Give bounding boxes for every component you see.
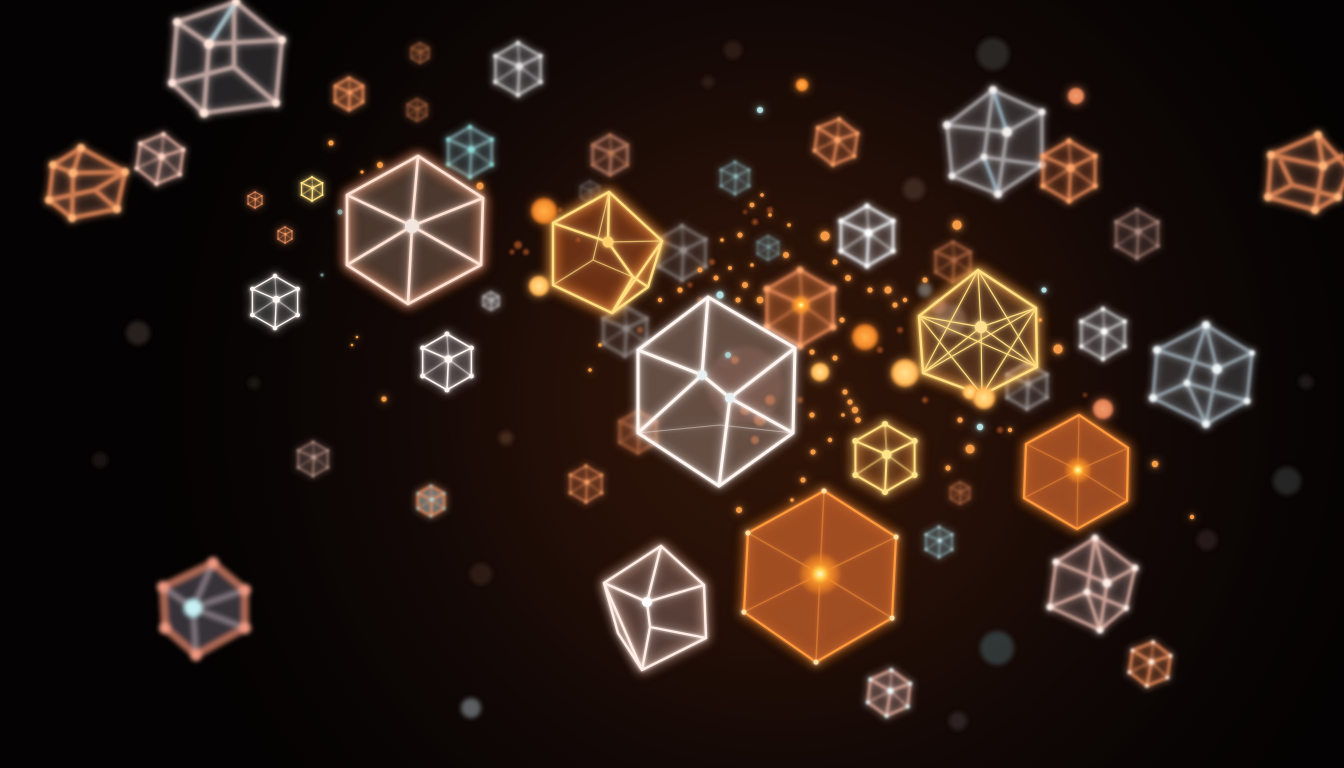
polyhedron: top-left cube: [168, 0, 286, 118]
small cube: [406, 98, 428, 122]
small cube: [1079, 307, 1127, 361]
orange particles: [328, 140, 1194, 519]
polyhedron: white cube bottom centre: [604, 546, 706, 670]
small cube: [579, 180, 601, 204]
small cube: [1126, 637, 1174, 691]
pale blue particles: [320, 107, 1047, 430]
glowing orbs: [528, 78, 1114, 596]
small cube: [601, 304, 649, 358]
tiny orange cube: [247, 191, 263, 209]
polyhedron: large orange hexagon: [741, 488, 899, 665]
polyhedron: pink cube lower right: [1046, 534, 1138, 634]
polyhedron: blue-grey cube far right: [1149, 321, 1255, 428]
polyhedron: large pink-white cube left of centre: [347, 156, 483, 304]
polyhedron: orange hexagon right: [1024, 415, 1128, 529]
small cube: [591, 133, 629, 177]
small cube: [569, 464, 603, 504]
small cube: [446, 125, 494, 179]
polyhedron: orange cube far left: [45, 144, 129, 222]
white small cube: [250, 274, 300, 330]
small cube: [764, 267, 836, 349]
small cube: [811, 114, 861, 170]
small cube: [1114, 208, 1160, 260]
small cube: [334, 77, 364, 111]
small cube: [925, 526, 953, 558]
small cube: [656, 224, 708, 282]
small cube: [864, 666, 914, 720]
small cube: [493, 41, 543, 97]
tiny gold cube: [300, 176, 324, 202]
white small cube: [420, 331, 474, 393]
coloured halos behind in-focus shapes: [347, 156, 1128, 670]
gold small cube: [852, 421, 918, 495]
small cube: [618, 409, 658, 455]
small cube: [1040, 138, 1098, 204]
small cube: [482, 291, 500, 311]
small cube: [132, 129, 188, 189]
polyhedron: grey cube top right: [943, 86, 1046, 198]
polyhedron: gold cube: [553, 192, 662, 313]
polyhedron: gold wireframe icosahedron: [919, 270, 1037, 395]
small cube: [410, 42, 430, 64]
polyhedron: large white central cube: [638, 297, 795, 486]
in-focus polyhedra layer: [247, 78, 1194, 670]
polyhedron: orange cube far right edge: [1264, 131, 1344, 214]
small cube: [720, 161, 750, 195]
small cube: [1005, 361, 1049, 411]
small cube: [934, 240, 972, 284]
tiny orange cube: [277, 226, 293, 244]
small cube: [297, 440, 329, 478]
small cube: [838, 203, 896, 269]
small cube: [417, 485, 445, 517]
soft rose cube lower left: [157, 557, 251, 661]
small cube: [949, 481, 971, 505]
small cube: [756, 235, 780, 261]
dim background particles: [510, 207, 1087, 444]
